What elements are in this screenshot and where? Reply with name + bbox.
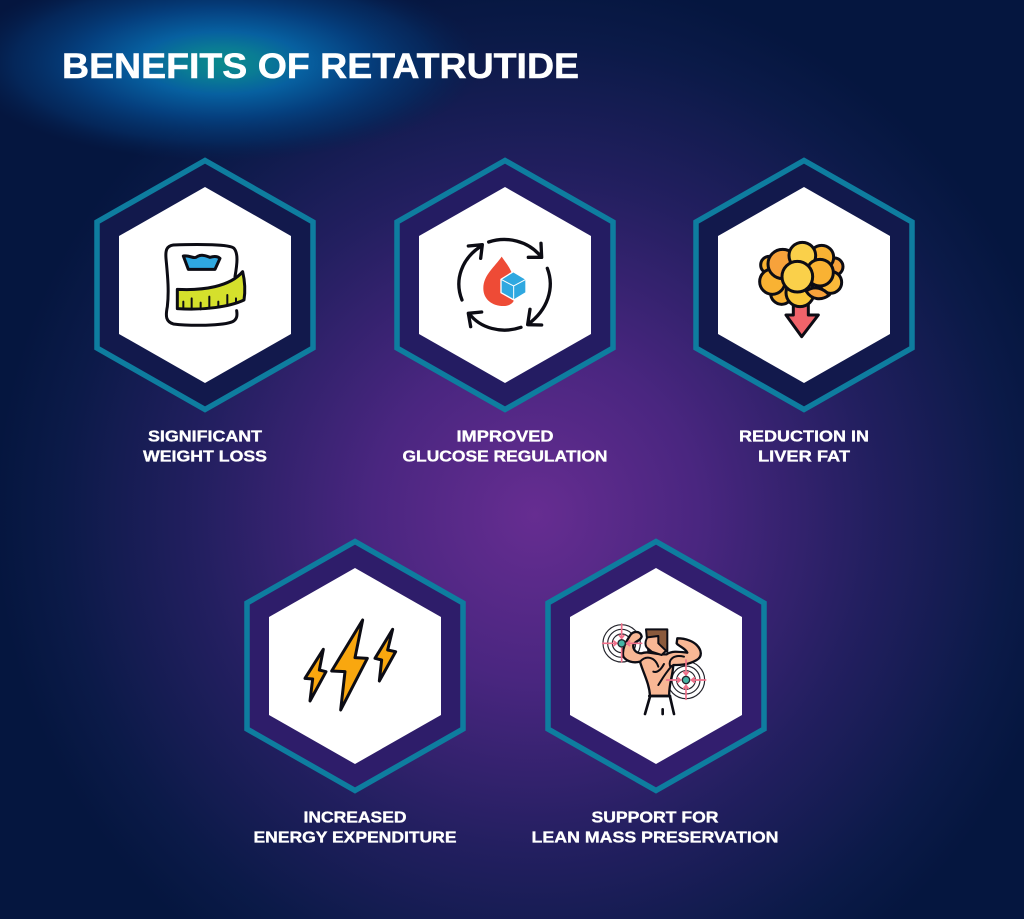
hexagon frame xyxy=(397,160,613,410)
hexagon frame xyxy=(247,542,463,790)
label: REDUCTION IN xyxy=(739,428,869,446)
label: LEAN MASS PRESERVATION xyxy=(532,830,778,846)
hexagon frame xyxy=(97,160,313,410)
panel: reduction in liver fat xyxy=(696,160,912,466)
icon: lightning bolts xyxy=(305,620,396,710)
label: IMPROVED xyxy=(456,428,554,446)
panel: significant weight loss xyxy=(97,160,313,466)
panel: lean mass preservation xyxy=(532,542,778,846)
label: GLUCOSE REGULATION xyxy=(402,448,608,466)
icon: fat cells with down arrow xyxy=(760,242,843,337)
label: SIGNIFICANT xyxy=(148,428,262,446)
label: WEIGHT LOSS xyxy=(143,448,267,466)
label: ENERGY EXPENDITURE xyxy=(254,830,457,846)
label: LIVER FAT xyxy=(758,448,850,466)
label: INCREASED xyxy=(304,810,406,826)
title: BENEFITS OF RETATRUTIDE xyxy=(62,47,579,86)
icon: blood drop and cycle arrows xyxy=(459,239,550,330)
hexagon frame xyxy=(696,160,912,410)
label: SUPPORT FOR xyxy=(592,810,719,826)
icon: muscular figure with targets xyxy=(603,624,706,714)
icon: scale with measuring tape xyxy=(166,245,245,325)
hexagon frame xyxy=(548,542,764,790)
panel: increased energy expenditure xyxy=(247,542,463,846)
panel: improved glucose regulation xyxy=(397,160,613,466)
title glow xyxy=(0,0,482,161)
